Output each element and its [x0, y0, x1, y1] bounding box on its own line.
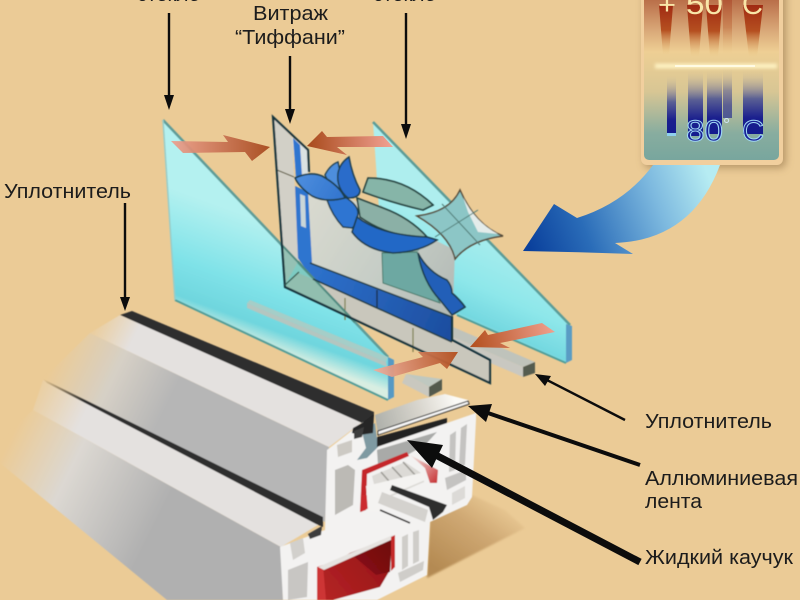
lower black gasket end — [390, 485, 447, 520]
arrow: lower right compression — [470, 323, 555, 348]
grey-green top leaf — [363, 178, 433, 210]
frame right ribs — [398, 530, 424, 582]
lower grey face — [0, 410, 283, 600]
label: stained glass Tiffany: “Тиффани” — [235, 27, 345, 49]
white ribs inside red — [372, 462, 424, 497]
glow line — [655, 64, 777, 68]
panel shadow — [644, 0, 786, 168]
lower red chamber floor — [322, 553, 390, 600]
lower red right strip — [391, 535, 395, 571]
label: liquid rubber: Жидкий каучук — [645, 547, 793, 569]
arrow: compress glass from right — [307, 131, 393, 155]
arrow: to right glass — [401, 13, 411, 139]
temperature minus eighty — [667, 115, 764, 148]
silver aluminium tape — [378, 401, 469, 435]
warm bars — [659, 0, 763, 57]
frame lower cavity — [288, 562, 308, 600]
arrow: to left sealant — [120, 203, 130, 311]
temperature panel — [641, 0, 786, 168]
arrow: compress glass from left — [171, 135, 270, 161]
blue left strip — [292, 137, 308, 178]
upper red reinforcement — [360, 452, 409, 512]
blue curved arrow — [523, 165, 720, 254]
label: stained glass Tiffany — [235, 3, 345, 49]
blue bottom band — [298, 258, 452, 342]
arrow: to stained glass — [285, 56, 295, 124]
label: sealant right: Уплотнитель — [645, 411, 772, 433]
Tiffany stained glass — [273, 117, 503, 383]
blue crescent — [352, 217, 437, 253]
lower black gasket — [43, 379, 323, 527]
right block ribs — [445, 424, 467, 490]
lower red chamber top edge — [318, 535, 393, 570]
textured left strip — [273, 117, 299, 285]
arrow: to aluminium tape — [468, 404, 640, 465]
temperature minus eighty: C — [742, 115, 764, 148]
shadow under frame — [427, 495, 525, 578]
cold bars — [667, 68, 763, 136]
white channel — [366, 472, 425, 512]
arrow: lower left compression — [373, 352, 458, 377]
upper grey face — [43, 333, 329, 522]
upper white band — [90, 315, 365, 447]
right glass pane — [373, 122, 572, 363]
panel frame — [641, 0, 783, 165]
arrow: to liquid rubber — [407, 440, 640, 562]
grey middle leaf — [357, 198, 427, 237]
under gasket ribs — [378, 492, 428, 522]
temperature minus eighty: ° — [723, 115, 730, 135]
red hook small — [361, 495, 370, 512]
lead outline — [273, 117, 490, 383]
lower red chamber back wall — [350, 537, 392, 575]
panel gradient — [644, 0, 779, 160]
left glass pane — [163, 120, 394, 400]
arrow: to right sealant — [535, 374, 625, 420]
label: aluminium tape — [645, 468, 798, 513]
textured bottom band — [285, 273, 490, 383]
upper black gasket — [120, 311, 374, 425]
star-shaped glass — [417, 190, 503, 259]
black clip lower — [308, 526, 322, 539]
arrow: to left glass — [164, 13, 174, 110]
blue floral petals — [325, 162, 345, 197]
grey wedge under rubber — [377, 432, 437, 465]
blue wavy piece — [418, 253, 465, 315]
black clip upper — [354, 427, 364, 439]
label: aluminium tape: Аллюминиевая — [645, 468, 798, 490]
gasket end — [352, 414, 374, 435]
pale corner near red — [410, 455, 438, 483]
frame upper cavity — [290, 538, 305, 560]
clear centre — [305, 172, 455, 335]
glass overlap corner — [281, 244, 353, 320]
grey seal wedge — [357, 423, 378, 460]
lower white band — [33, 380, 323, 547]
PVC window profile — [0, 311, 476, 600]
rebate top face — [375, 394, 468, 434]
left spacer bar — [247, 300, 388, 367]
label: sealant left: Уплотнитель — [4, 181, 131, 203]
teal tint right part — [380, 205, 427, 253]
right block cavity — [452, 486, 465, 505]
teal lower glass — [382, 252, 440, 303]
sash lower cavity — [335, 465, 355, 515]
temperature minus eighty: 80 — [686, 115, 723, 148]
label: aluminium tape: лента — [645, 491, 703, 513]
label: stained glass Tiffany: Витраж — [253, 3, 329, 25]
front spacer bar — [402, 374, 442, 397]
lower red chamber left strip — [317, 565, 326, 600]
sash upper cavity — [337, 440, 352, 457]
temperature plus fifty — [658, 0, 763, 21]
right spacer bar — [453, 327, 535, 377]
profile white body — [280, 413, 476, 600]
liquid rubber strip — [377, 418, 447, 447]
